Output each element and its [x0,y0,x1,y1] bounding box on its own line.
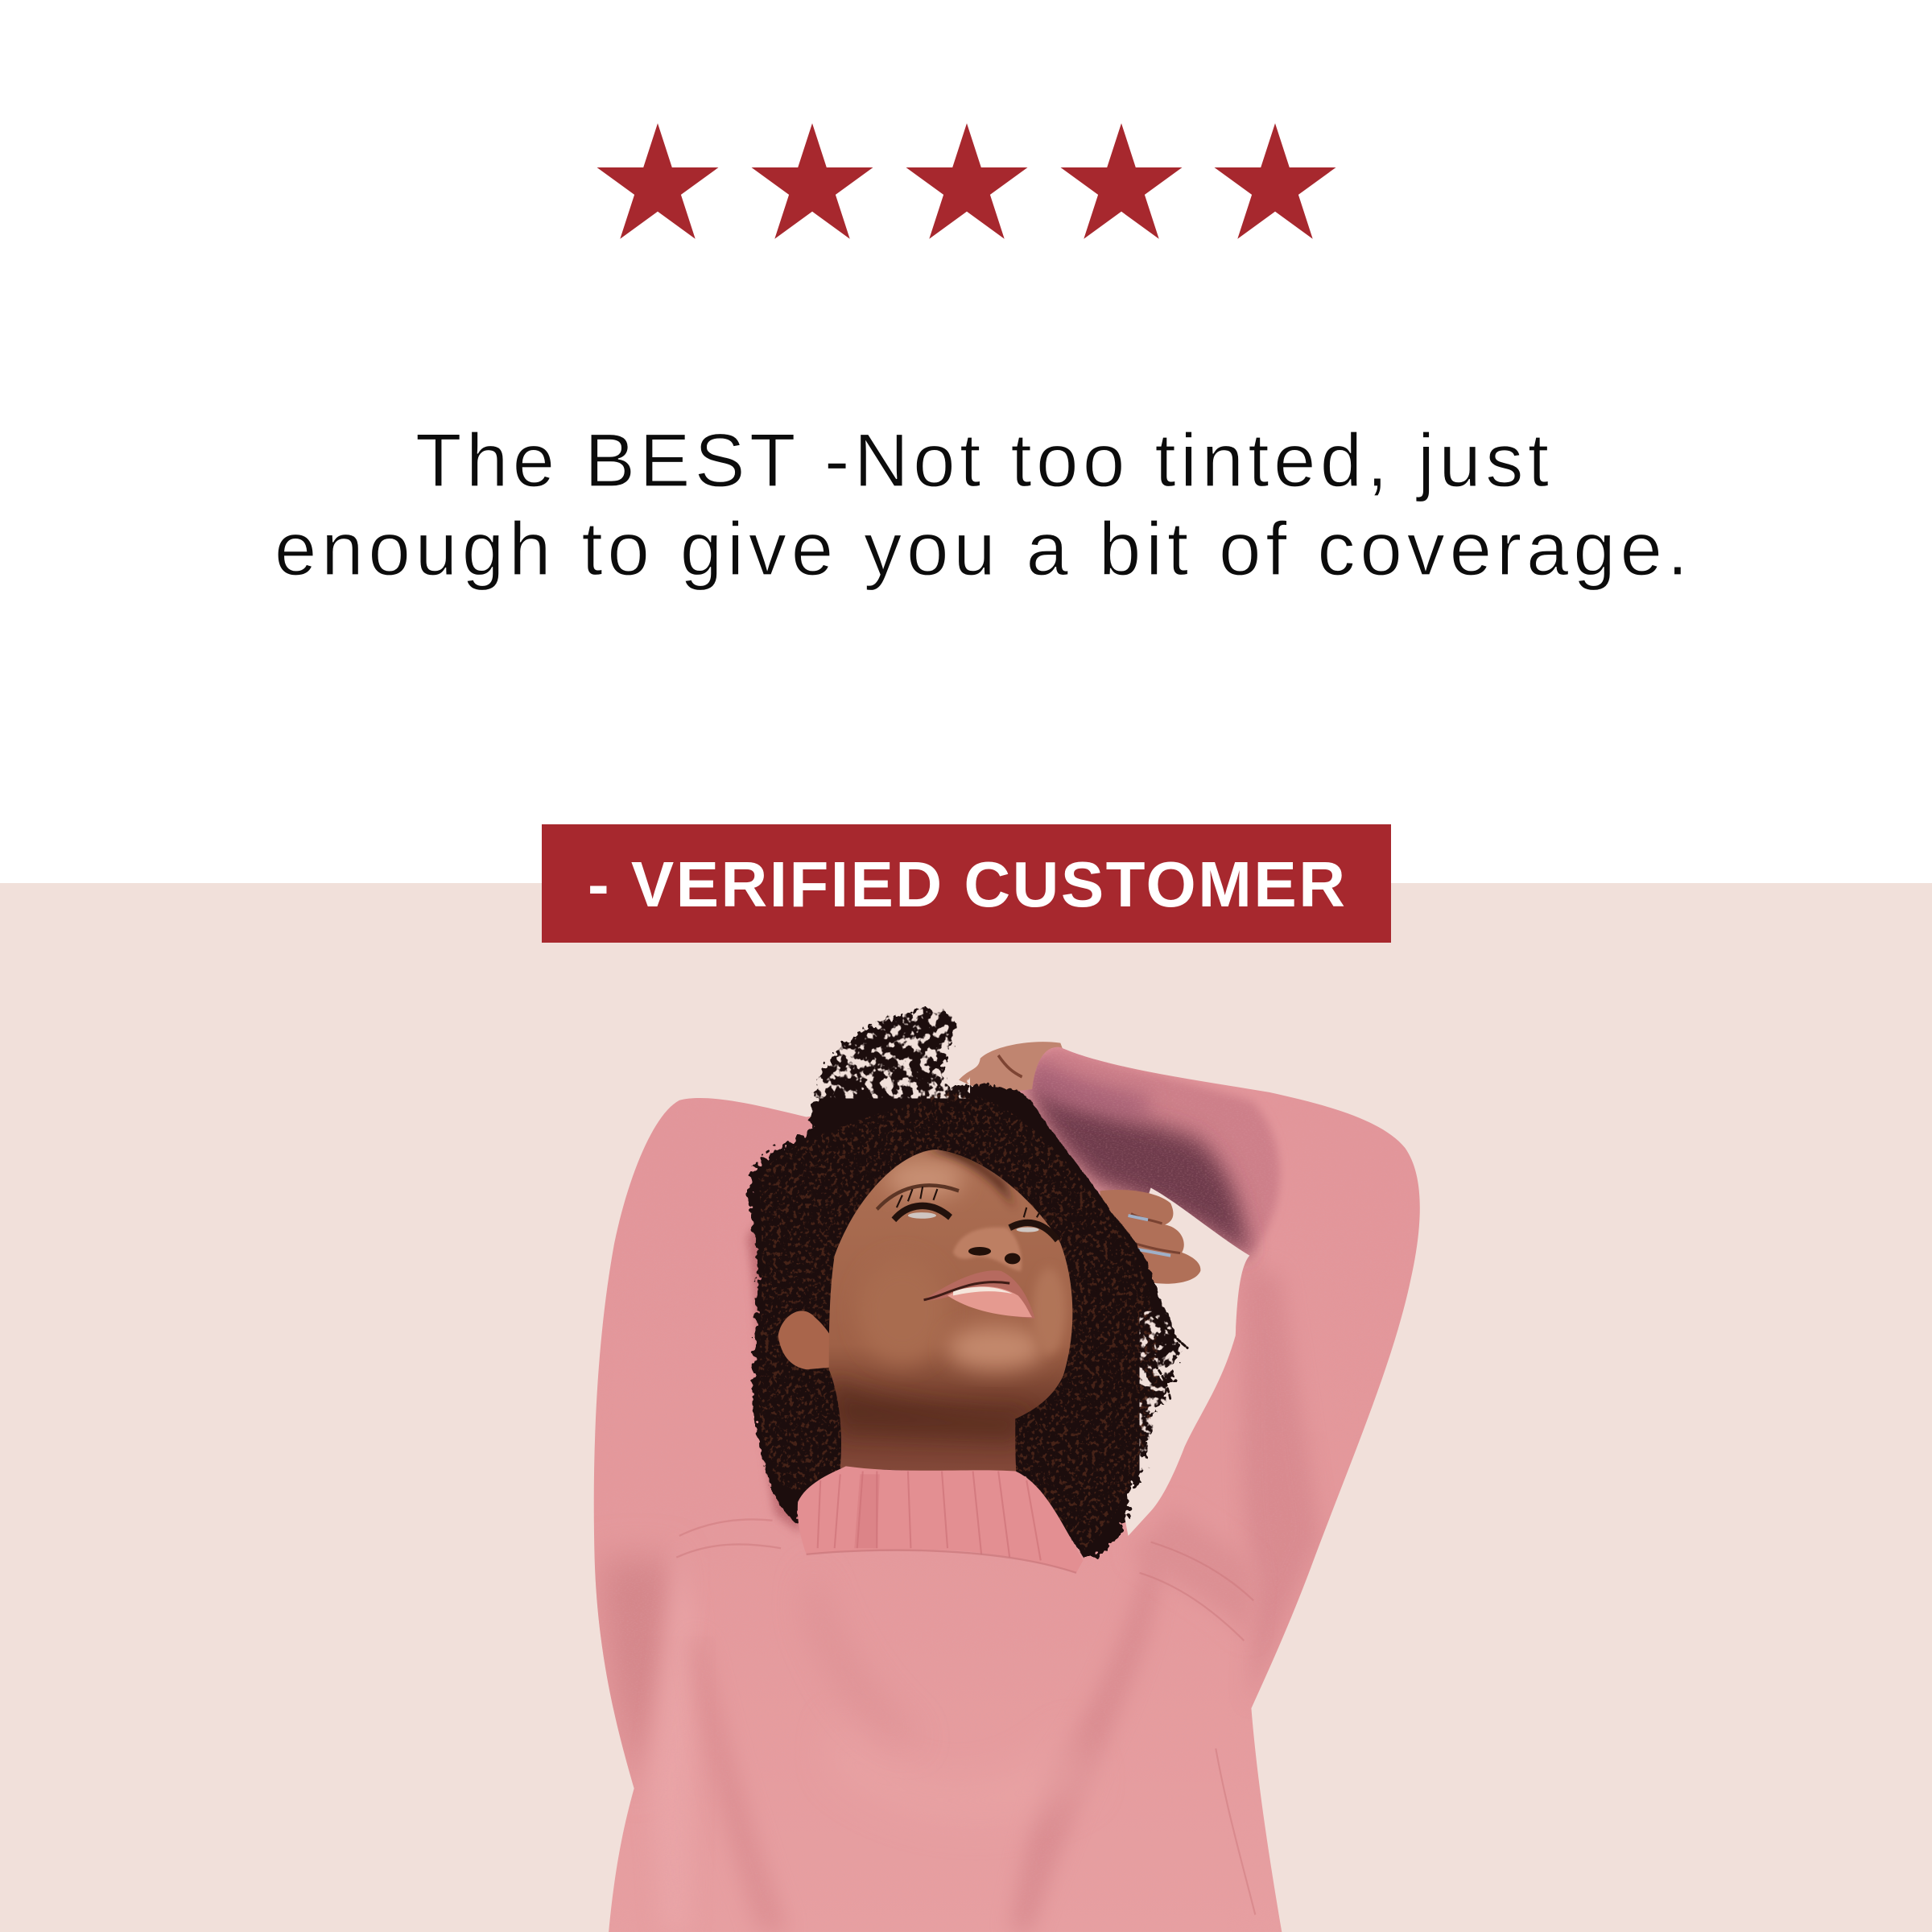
eyes and brows [877,1185,1058,1241]
photo: woman in pink sweater looking up [564,1003,1449,1932]
panel: blush bottom background [0,883,1932,1932]
face and neck [778,1145,1072,1474]
panel: white top background [0,0,1932,883]
brown curl texture across the hair [758,1092,1158,1551]
five star rating [597,123,1336,239]
lower hand with painted nails [1100,1190,1200,1284]
turtleneck collar [798,1466,1083,1573]
light showing through flyaway curls at the crown [815,1006,970,1098]
hand on top of head [959,1042,1071,1096]
knit seams [676,1519,1255,1915]
smiling mouth [924,1270,1035,1319]
torso fold shadows [1011,1578,1156,1930]
flyaway curl strands [1151,1317,1187,1401]
shaded forearm [1026,1047,1280,1256]
review quote [275,418,1688,591]
knit texture [782,1071,1251,1509]
review quote: enough to give you a bit of coverage. [275,506,1688,591]
hair mass [749,1003,1196,1561]
sleeve shadow on left arm [596,1554,670,1758]
gap between arm and hair [1094,1188,1249,1536]
nose [953,1228,1022,1271]
attribution banner [542,824,1391,943]
sweater silhouette [564,1028,1449,1932]
upper arm shading [1243,1274,1319,1666]
attribution banner: - VERIFIED CUSTOMER [588,848,1345,920]
review quote: The BEST -Not too tinted, just [415,418,1549,502]
light showing through flyaway curls at the right fringe [1140,1311,1182,1472]
